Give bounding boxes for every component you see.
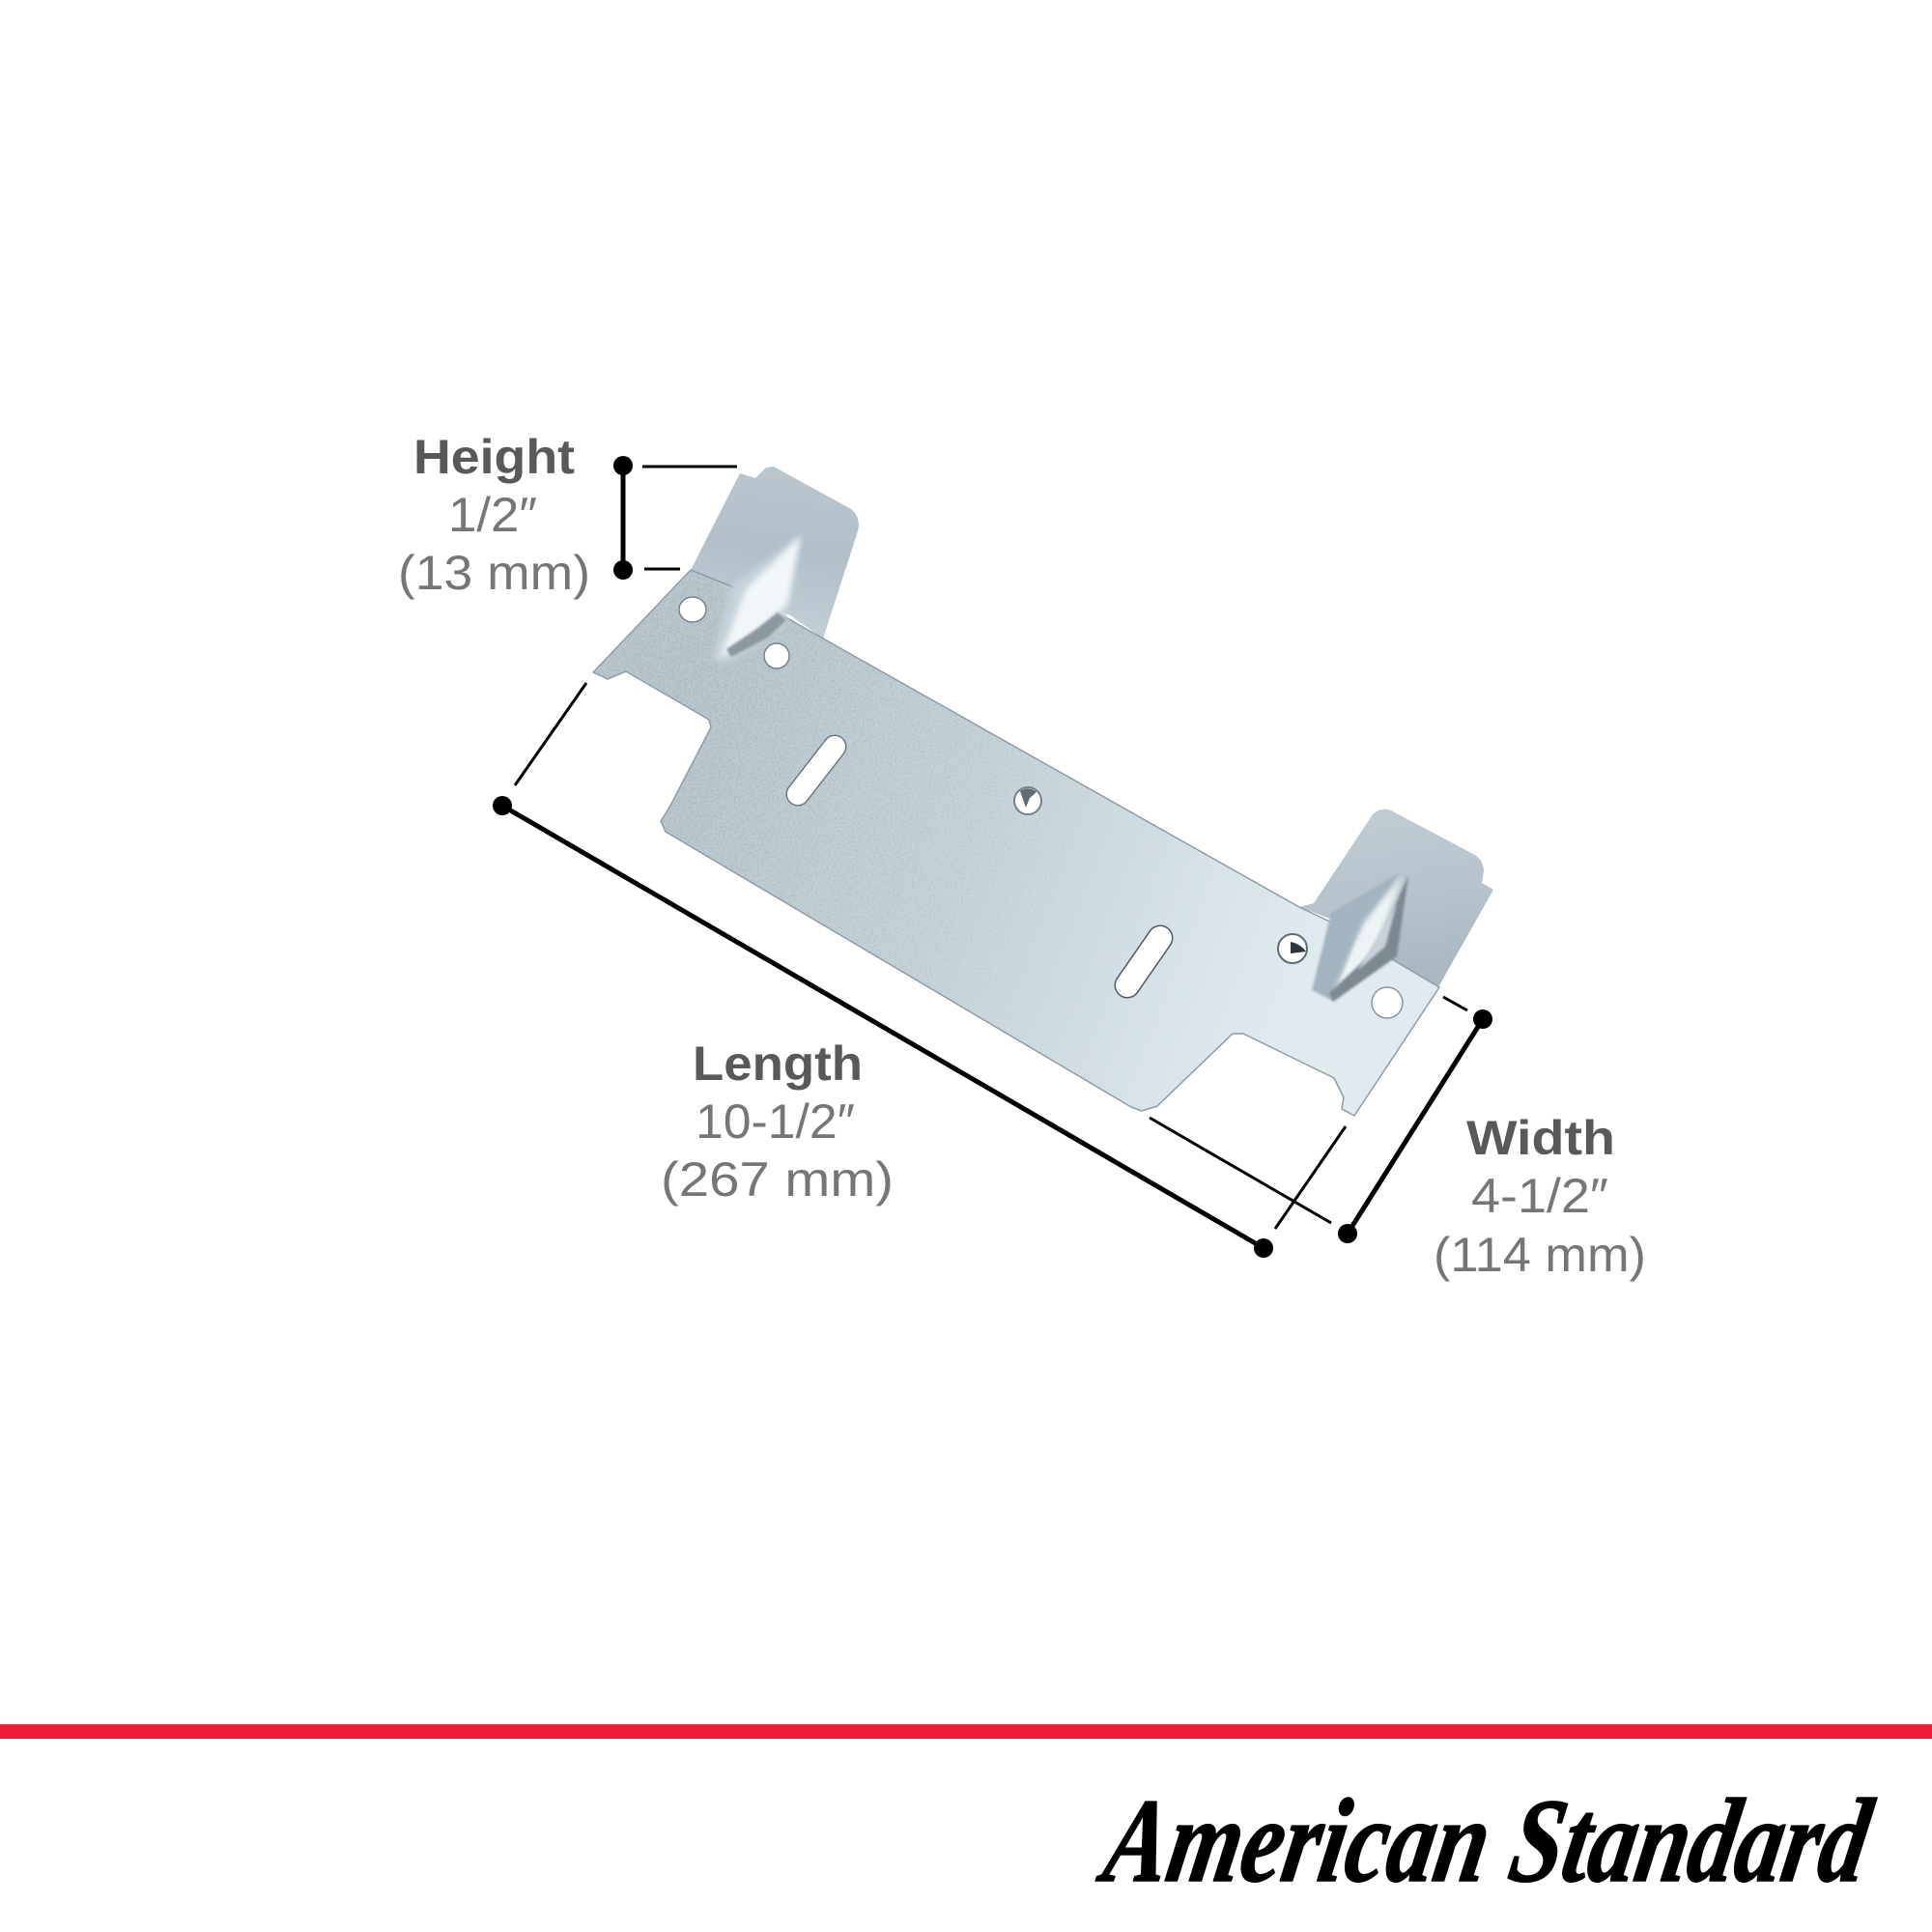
dimension: height <box>398 430 737 600</box>
width markers <box>1338 1009 1492 1243</box>
dimension: width <box>1150 997 1646 1282</box>
width label: 4-1/2″ <box>1471 1169 1608 1223</box>
height lines <box>623 466 737 570</box>
width label <box>1434 1111 1646 1282</box>
left slot <box>798 747 835 794</box>
right upturned flange <box>1299 810 1493 1005</box>
left upturned flange <box>691 467 859 639</box>
plate surface texture <box>595 570 1094 1032</box>
length markers <box>493 796 1273 1258</box>
height label <box>398 430 590 600</box>
length label: Length <box>693 1037 863 1091</box>
right end mounting holes <box>1278 934 1403 1018</box>
metal mounting bracket <box>580 464 1493 1140</box>
length lines <box>502 683 1346 1248</box>
length label: 10-1/2″ <box>696 1094 855 1149</box>
height label: 1/2″ <box>448 488 537 542</box>
height markers <box>613 456 633 580</box>
length label: (267 mm) <box>661 1152 894 1207</box>
right dimple <box>1312 872 1408 1002</box>
center screw hole <box>1014 787 1041 814</box>
left dimple <box>713 533 802 663</box>
width label: (114 mm) <box>1434 1228 1646 1282</box>
width label: Width <box>1466 1111 1615 1165</box>
main plate <box>593 570 1439 1116</box>
right slot <box>1127 938 1160 985</box>
red divider bar <box>0 1724 1932 1739</box>
dimension: length <box>493 683 1346 1258</box>
height label: (13 mm) <box>398 546 590 600</box>
width lines <box>1150 997 1483 1234</box>
left end mounting holes <box>679 597 789 668</box>
height label: Height <box>413 430 575 484</box>
length label <box>661 1037 894 1207</box>
